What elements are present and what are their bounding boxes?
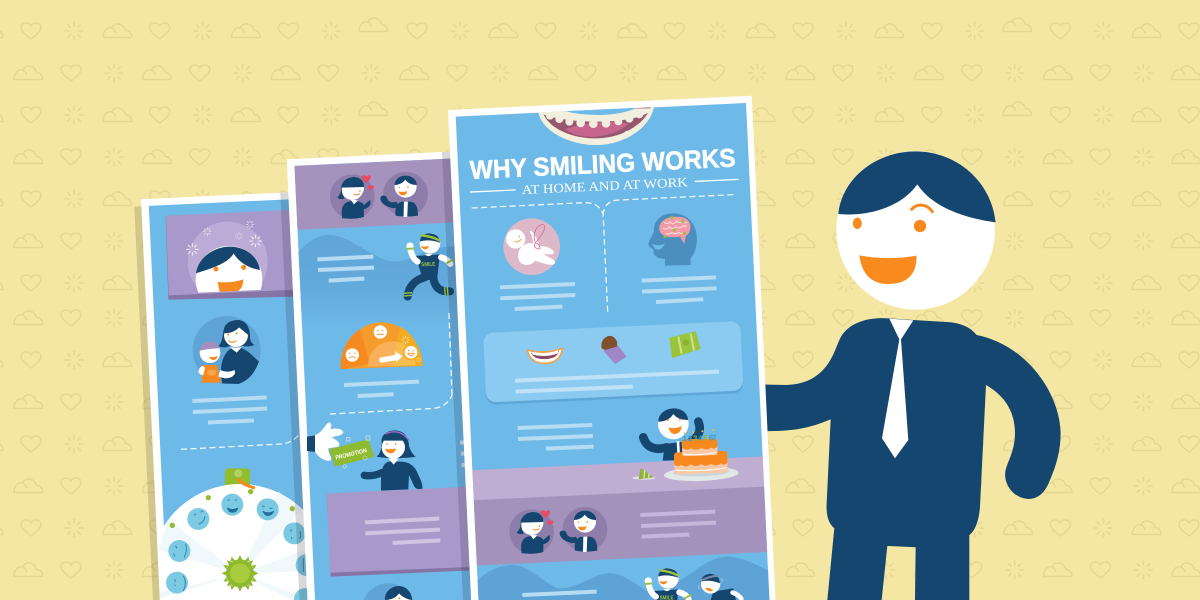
icon: birthday cake: 4 — [698, 434, 703, 443]
icon: runners — [645, 568, 741, 600]
text lines: gauge — [344, 382, 419, 396]
icon: promotion hand: PROMOTION — [335, 448, 367, 462]
icon: birthday cake: 2 — [688, 434, 692, 443]
text lines: running — [317, 257, 374, 281]
mountains — [295, 235, 465, 327]
short text lines at sheet edge — [460, 442, 467, 465]
text lines: brain — [642, 277, 717, 302]
icon: birthday cake: 6 — [709, 433, 713, 442]
text lines: cake — [518, 425, 594, 449]
icon: birthday cake: 7 — [712, 433, 717, 442]
subtitle with rules — [470, 172, 739, 200]
icon: runner — [404, 233, 453, 297]
text lines: couple — [640, 512, 716, 537]
wheel smiley faces — [166, 494, 318, 600]
panel: middle sheet — [286, 152, 472, 600]
bottom mountains — [473, 557, 773, 600]
text lines: mother and child — [192, 397, 267, 422]
man body — [753, 318, 1061, 600]
text lines: baby — [500, 284, 575, 309]
wheel green sun — [222, 555, 258, 592]
icon: mood gauge — [341, 322, 423, 369]
collar and tie — [882, 319, 913, 458]
couple illustration — [509, 507, 607, 554]
dashed connectors — [472, 195, 739, 319]
big smiling mouth — [538, 107, 654, 145]
icon: baby — [503, 218, 560, 275]
title: WHY SMILING WORKS — [469, 143, 736, 185]
purple text panel — [328, 487, 493, 576]
icon: promotion hand — [307, 423, 374, 468]
dashed connector — [330, 313, 452, 414]
man presenting — [753, 151, 1061, 600]
icon: runner: SMILE — [421, 262, 436, 268]
icon: woman — [364, 431, 422, 491]
shadow of front sheet — [442, 152, 471, 600]
icon: birthday cake — [662, 428, 739, 482]
icon: head with brain — [648, 213, 697, 266]
couple illustration — [330, 172, 428, 219]
icon: smile, chocolate, money — [527, 332, 700, 364]
man behind cake — [643, 408, 700, 461]
wheel of smiles — [157, 468, 308, 600]
icon: bottom circle portrait — [364, 583, 413, 600]
icon: birthday cake: 1 — [682, 434, 688, 443]
man head — [836, 151, 996, 310]
purple smiling face banner — [166, 210, 294, 300]
light blue panel — [483, 321, 744, 405]
icon: birthday cake: 3 — [693, 434, 698, 443]
icon: birthday cake: 5 — [703, 433, 709, 443]
panel: back sheet — [134, 192, 308, 600]
panel: front sheet — [448, 96, 776, 600]
subtitle with rules: AT HOME AND AT WORK — [521, 174, 689, 197]
text lines: panel — [515, 372, 719, 392]
icon: mother and child — [193, 316, 261, 384]
dashed connector — [181, 433, 300, 449]
text line: bottom — [522, 592, 597, 595]
table band — [472, 457, 767, 566]
party hat — [633, 468, 655, 480]
shadow of middle sheet — [280, 192, 308, 600]
